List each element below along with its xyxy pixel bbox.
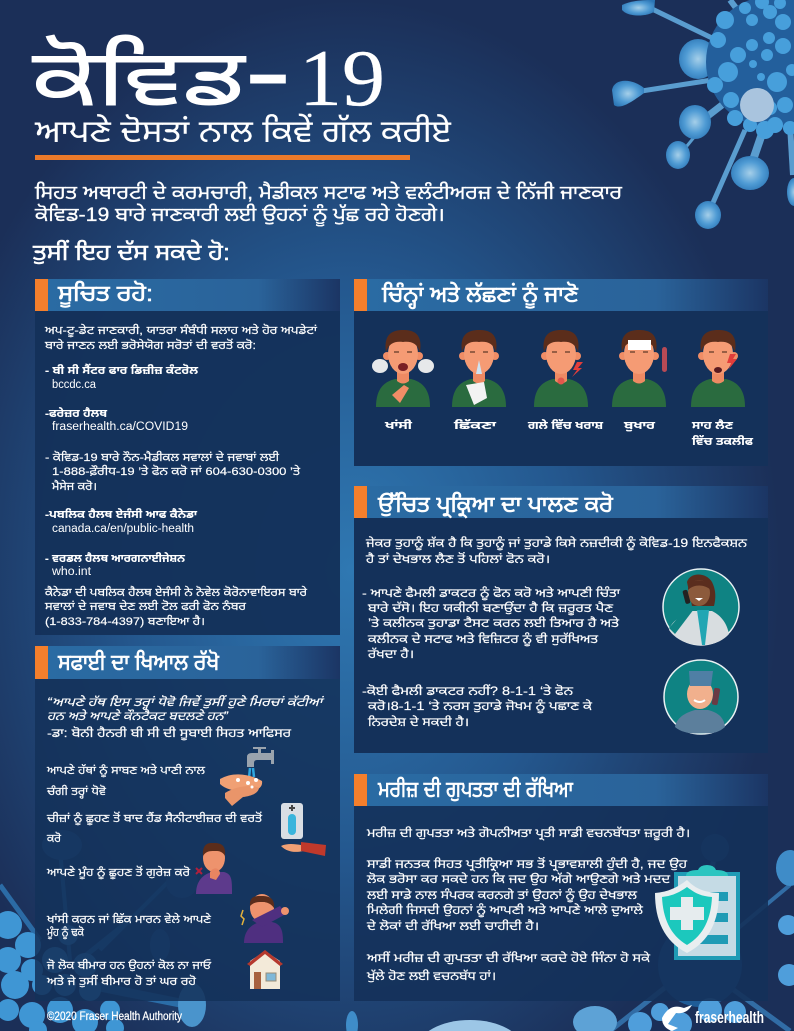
sanitizer advice: ਚੀਜ਼ਾਂ ਨੂੰ ਛੂਹਣ ਤੋਂ ਬਾਦ ਹੈਂਡ ਸੈਨੀਟਾਈਜ਼ਰ ਦੀ ਵਰਤੋਂ	[46, 812, 263, 825]
resources list: canada.ca/en/public-health	[52, 523, 194, 535]
symptom: sore throat: ਗਲੇ ਵਿੱਚ ਖਰਾਸ਼	[527, 418, 604, 432]
symptom: sneezing	[452, 330, 506, 432]
symptom: difficulty breathing	[691, 330, 754, 448]
symptom: cough: ਖਾਂਸੀ	[384, 418, 413, 432]
family doctor advice	[362, 585, 620, 661]
hand washing advice: ਆਪਣੇ ਹੱਥਾਂ ਨੂੰ ਸਾਬਣ ਅਤੇ ਪਾਣੀ ਨਾਲ	[46, 763, 206, 777]
title	[32, 23, 385, 123]
resources list: - ਕੋਵਿਡ-19 ਬਾਰੇ ਨੌਨ-ਮੈਡੀਕਲ ਸਵਾਲਾਂ ਦੇ ਜਵਾਬਾਂ ਲਈ	[45, 450, 280, 464]
no family doctor advice	[362, 683, 593, 729]
virus illustration: bottom right	[346, 834, 794, 1031]
copyright: ©2020 Fraser Health Authority	[47, 1011, 182, 1023]
resources list: ਸਵਾਲਾਂ ਦੇ ਜਵਾਬ ਦੇਣ ਲਈ ਟੋਲ ਫਰੀ ਫੋਨ ਨੰਬਰ	[44, 599, 247, 613]
subheading: you can say: ਤੁਸੀਂ ਇਹ ਦੱਸ ਸਕਦੇ ਹੋ:	[32, 239, 230, 265]
title: –	[248, 23, 288, 123]
icon: sanitizer dispenser	[281, 803, 326, 856]
family doctor advice: ਬਾਰੇ ਦੱਸੋ। ਇਹ ਯਕੀਨੀ ਬਣਾਉਂਦਾ ਹੈ ਕਿ ਜ਼ਰੂਰਤ ਪੈਣ	[367, 600, 614, 616]
title: 19	[299, 33, 385, 123]
intro paragraph: ਸਿਹਤ ਅਥਾਰਟੀ ਦੇ ਕਰਮਚਾਰੀ, ਮੈਡੀਕਲ ਸਟਾਫ ਅਤੇ ਵਲੰਟੀਅਰਜ਼ ਦੇ ਨਿੱਜੀ ਜਾਣਕਾਰ	[34, 181, 623, 204]
panel: follow proper procedure	[354, 486, 768, 753]
symptom: sneezing: ਛਿੱਕਣਾ	[453, 418, 496, 432]
confidentiality text: ਮਰੀਜ਼ ਦੀ ਗੁਪਤਤਾ ਅਤੇ ਗੋਪਨੀਅਤਾ ਪ੍ਰਤੀ ਸਾਡੀ ਵਚਨਬੱਧਤਾ ਜ਼ਰੂਰੀ ਹੈ।	[366, 825, 690, 841]
logo: fraserhealth: fraserhealth	[695, 1008, 764, 1027]
virus illustration: top right	[612, 0, 794, 229]
confidentiality text: ਲੋਕ ਭਰੋਸਾ ਕਰ ਸਕਦੇ ਹਨ ਕਿ ਜਦ ਉਹ ਅੱਗੇ ਆਉਣਗੇ ਅਤੇ ਮਦਦ	[366, 871, 671, 886]
icon: person coughing into elbow	[241, 894, 289, 943]
face touching advice: ਆਪਣੇ ਮੂੰਹ ਨੂੰ ਛੂਹਣ ਤੋਂ ਗੁਰੇਜ਼ ਕਰੋ	[46, 865, 191, 879]
resources list: ਬਾਰੇ ਜਾਣਨ ਲਈ ਭਰੋਸੇਯੋਗ ਸਰੋਤਾਂ ਦੀ ਵਰਤੋਂ ਕਰੋ:	[44, 338, 256, 352]
hand washing advice	[46, 763, 206, 799]
icon: nurse on phone	[664, 660, 738, 734]
no family doctor advice: -ਕੋਈ ਫੈਮਲੀ ਡਾਕਟਰ ਨਹੀਂ? 8-1-1 ‘ਤੇ ਫੋਨ	[362, 683, 573, 698]
no family doctor advice: ਕਰੋ।8-1-1 ‘ਤੇ ਨਰਸ ਤੁਹਾਡੇ ਜੋਖਮ ਨੂੰ ਪਛਾਣ ਕੇ	[367, 698, 593, 714]
sanitizer advice: ਕਰੋ	[46, 831, 62, 845]
resources list: fraserhealth.ca/COVID19	[52, 421, 188, 433]
resources list: ਕੈਨੇਡਾ ਦੀ ਪਬਲਿਕ ਹੈਲਥ ਏਜੰਸੀ ਨੇ ਨੋਵੇਲ ਕੋਰੋਨਾਵਾਇਰਸ ਬਾਰੇ	[44, 585, 308, 599]
panel: patient confidentiality	[354, 774, 768, 1001]
confidentiality text: ਅਸੀਂ ਮਰੀਜ਼ ਦੀ ਗੁਪਤਤਾ ਦੀ ਰੱਖਿਆ ਕਰਦੇ ਹੋਏ ਜਿੰਨਾ ਹੋ ਸਕੇ	[366, 950, 651, 965]
no family doctor advice: ਨਿਰਦੇਸ਼ ਦੇ ਸਕਦੀ ਹੈ।	[367, 714, 469, 729]
icon: doctor on phone	[663, 569, 739, 645]
procedure intro: ਜੇਕਰ ਤੁਹਾਨੂੰ ਸ਼ੱਕ ਹੈ ਕਿ ਤੁਹਾਨੂੰ ਜਾਂ ਤੁਹਾਡੇ ਕਿਸੇ ਨਜ਼ਦੀਕੀ ਨੂੰ ਕੋਵਿਡ-19 ਇਨਫੈਕਸ਼ਨ	[365, 535, 747, 551]
resources list: - ਬੀ ਸੀ ਸੈਂਟਰ ਫਾਰ ਡਿਜ਼ੀਜ਼ ਕੰਟਰੋਲ	[45, 363, 198, 377]
procedure intro: ਹੈ ਤਾਂ ਦੇਖਭਾਲ ਲੈਣ ਤੋਂ ਪਹਿਲਾਂ ਫੋਨ ਕਰੋ।	[365, 551, 550, 566]
confidentiality text: ਖੁੱਲੇ ਹੋਣ ਲਈ ਵਚਨਬੱਧ ਹਾਂ।	[366, 968, 496, 983]
resources list: - ਵਰਡਲ ਹੈਲਥ ਆਰਗਨਾਈਜੇਸ਼ਨ	[45, 551, 185, 565]
panel header: patient confidentiality: ਮਰੀਜ਼ ਦੀ ਗੁਪਤਤਾ ਦੀ ਰੱਖਿਆ	[377, 776, 573, 802]
resources list: who.int	[51, 566, 92, 578]
family doctor advice: ਰੱਖਦਾ ਹੈ।	[367, 646, 414, 661]
icon: clipboard with shield	[655, 865, 740, 960]
cough advice: ਖਾਂਸੀ ਕਰਨ ਜਾਂ ਛਿੱਕ ਮਾਰਨ ਵੇਲੇ ਆਪਣੇ	[46, 912, 211, 926]
panel header: signs and symptoms	[354, 279, 768, 311]
virus illustration: bottom left	[0, 830, 206, 1031]
stay home advice	[46, 958, 212, 988]
panel header: patient confidentiality	[354, 774, 768, 806]
icon: person touching face	[196, 843, 232, 894]
resources list: -ਪਬਲਿਕ ਹੈਲਥ ਏਜੰਸੀ ਆਫ ਕੈਨੇਡਾ	[45, 507, 197, 521]
sanitizer advice	[46, 812, 263, 845]
panel header: hygiene	[35, 646, 340, 679]
confidentiality text: ਲਈ ਸਾਡੇ ਨਾਲ ਸੰਪਰਕ ਕਰਨਗੇ ਤਾਂ ਉਹਨਾਂ ਨੂੰ ਉਹ ਦੇਖਭਾਲ	[366, 887, 638, 903]
confidentiality text	[366, 825, 690, 983]
icon: washing hands under tap	[220, 747, 274, 806]
resources list: ਮੈਸੇਜ ਕਰੋ।	[51, 479, 97, 493]
hand washing advice: ਚੰਗੀ ਤਰ੍ਹਾਂ ਧੋਵੋ	[46, 784, 107, 799]
symptom: fever	[612, 330, 667, 432]
title: ਕੋਵਿਡ	[32, 34, 247, 122]
resources list: (1-833-784-4397) ਬਣਾਇਆ ਹੈ।	[45, 615, 205, 628]
intro paragraph	[34, 181, 623, 228]
panel: signs and symptoms	[354, 279, 768, 466]
panel: stay informed	[35, 279, 340, 635]
panel: hygiene	[35, 646, 340, 1001]
panel header: hygiene: ਸਫਾਈ ਦਾ ਖਿਆਲ ਰੱਖੋ	[57, 649, 220, 675]
quote: “ਆਪਣੇ ਹੱਥ ਇਸ ਤਰ੍ਹਾਂ ਧੋਵੋ ਜਿਵੇਂ ਤੁਸੀਂ ਹੁਣੇ ਮਿਰਚਾਂ ਕੱਟੀਆਂ	[47, 695, 325, 710]
panel header: signs and symptoms: ਚਿੰਨ੍ਹਾਂ ਅਤੇ ਲੱਛਣਾਂ ਨੂੰ ਜਾਣੋ	[381, 281, 578, 310]
procedure intro	[365, 535, 747, 566]
confidentiality text: ਸਾਡੀ ਜਨਤਕ ਸਿਹਤ ਪ੍ਰਤੀਕ੍ਰਿਆ ਸਭ ਤੋਂ ਪ੍ਰਭਾਵਸ਼ਾਲੀ ਹੁੰਦੀ ਹੈ, ਜਦ ਉਹ	[366, 856, 687, 872]
stay home advice: ਅਤੇ ਜੇ ਤੁਸੀਂ ਬੀਮਾਰ ਹੋ ਤਾਂ ਘਰ ਰਹੋ	[46, 974, 197, 988]
family doctor advice: ’ਤੇ ਕਲੀਨਕ ਤੁਹਾਡਾ ਟੈਸਟ ਕਰਨ ਲਈ ਤਿਆਰ ਹੈ ਅਤੇ	[368, 615, 620, 630]
family doctor advice: - ਆਪਣੇ ਫੈਮਲੀ ਡਾਕਟਰ ਨੂੰ ਫੋਨ ਕਰੋ ਅਤੇ ਆਪਣੀ ਚਿੰਤਾ	[362, 585, 620, 601]
subtitle: ਆਪਣੇ ਦੋਸਤਾਂ ਨਾਲ ਕਿਵੇਂ ਗੱਲ ਕਰੀਏ	[34, 114, 452, 149]
logo: fraserhealth	[662, 1005, 764, 1031]
quote	[47, 695, 325, 741]
orange title rule	[35, 155, 410, 160]
quote: ਹਨ ਅਤੇ ਆਪਣੇ ਕੌਨਟੈਕਟ ਬਦਲਣੇ ਹਨ”	[47, 709, 229, 723]
resources list: ਅਪ-ਟੂ-ਡੇਟ ਜਾਣਕਾਰੀ, ਯਾਤਰਾ ਸੰਬੰਧੀ ਸਲਾਹ ਅਤੇ ਹੋਰ ਅਪਡੇਟਾਂ	[44, 323, 317, 337]
symptom: difficulty breathing: ਵਿੱਚ ਤਕਲੀਫ	[691, 434, 754, 448]
icon: house	[247, 950, 283, 989]
resources list: 1-888-ਫ਼ੌਰੀਧ-19 ’ਤੇ ਫੋਨ ਕਰੋ ਜਾਂ 604-630-0300 ’ਤੇ	[52, 464, 301, 478]
resources list: bccdc.ca	[52, 379, 97, 391]
cough advice	[46, 912, 211, 939]
symptom: sore throat	[527, 330, 604, 432]
panel header: stay informed	[35, 279, 340, 311]
symptom: cough	[372, 330, 434, 432]
family doctor advice: ਕਲੀਨਕ ਦੇ ਸਟਾਫ ਅਤੇ ਵਿਜ਼ਿਟਰ ਨੂੰ ਵੀ ਸੁਰੱਖਿਅਤ	[367, 631, 599, 647]
intro paragraph: ਕੋਵਿਡ-19 ਬਾਰੇ ਜਾਣਕਾਰੀ ਲਈ ਉਹਨਾਂ ਨੂੰ ਪੁੱਛ ਰਹੇ ਹੋਣਗੇ।	[34, 203, 445, 228]
quote: -ਡਾ: ਬੋਨੀ ਹੈਨਰੀ ਬੀ ਸੀ ਦੀ ਸੂਬਾਈ ਸਿਹਤ ਆਫਿਸਰ	[47, 725, 292, 741]
cough advice: ਮੂੰਹ ਨੂੰ ਢਕੋ	[46, 925, 84, 939]
confidentiality text: ਮਿਲੇਗੀ ਜਿਸਦੀ ਉਹਨਾਂ ਨੂੰ ਆਪਣੀ ਅਤੇ ਆਪਣੇ ਆਲੇ ਦੁਆਲੇ	[366, 902, 644, 918]
confidentiality text: ਦੇ ਲੋਕਾਂ ਦੀ ਰੱਖਿਆ ਲਈ ਚਾਹੀਦੀ ਹੈ।	[366, 918, 539, 933]
panel header: follow proper procedure	[354, 486, 768, 519]
stay home advice: ਜੋ ਲੋਕ ਬੀਮਾਰ ਹਨ ਉਹਨਾਂ ਕੋਲ ਨਾ ਜਾਓ	[46, 958, 212, 972]
panel header: stay informed: ਸੂਚਿਤ ਰਹੋ:	[57, 280, 153, 308]
symptom: fever: ਬੁਖਾਰ	[623, 420, 655, 432]
resources list	[44, 323, 317, 628]
resources list: -ਫਰੇਜ਼ਰ ਹੈਲਥ	[45, 406, 108, 420]
panel header: follow proper procedure: ਉੱਚਿਤ ਪ੍ਰਕ੍ਰਿਆ ਦਾ ਪਾਲਣ ਕਰੋ	[377, 491, 613, 519]
symptom: difficulty breathing: ਸਾਹ ਲੈਣ	[691, 418, 734, 432]
